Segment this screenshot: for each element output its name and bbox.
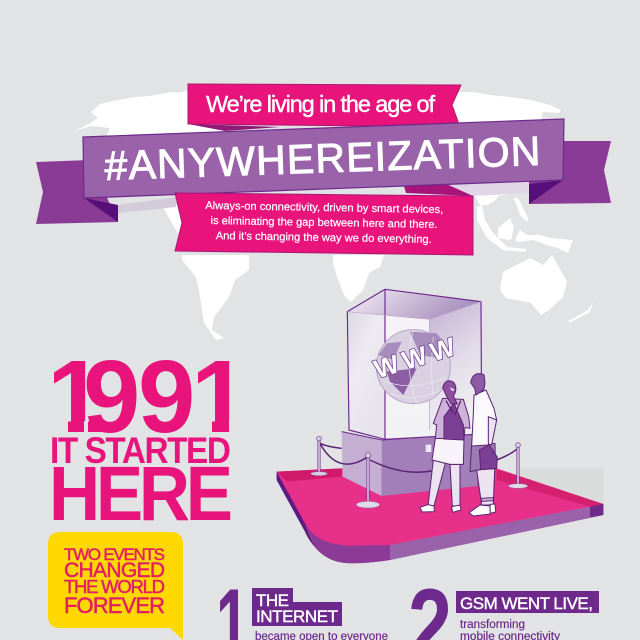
glass case — [347, 289, 482, 439]
event 2 description: transforming — [460, 619, 525, 631]
top banner text: We’re living in the age of — [206, 91, 435, 117]
callout text: THE WORLD — [64, 576, 165, 597]
ribbon: right fold — [529, 180, 563, 204]
callout text: FOREVER — [64, 593, 165, 618]
callout: two events — [48, 532, 183, 640]
heading: 1991 it started here: IT STARTED — [50, 430, 231, 471]
subtitle text: And it’s changing the way we do everything. — [216, 230, 432, 246]
event 2 description — [460, 619, 560, 640]
platform — [277, 468, 603, 563]
heading: 1991 it started here — [40, 339, 253, 537]
ribbon shadow: right — [440, 180, 529, 196]
main title: #ANYWHEREIZATION — [104, 128, 541, 189]
subtitle text — [205, 200, 443, 246]
ribbon: left tail — [36, 160, 118, 224]
infographic canvas — [36, 84, 611, 640]
label box: the internet — [252, 588, 342, 626]
callout text — [64, 545, 165, 618]
heading: 1991 it started here: HERE — [49, 450, 233, 537]
world map — [73, 90, 593, 340]
bottom banner fold — [403, 183, 473, 196]
label box: the internet: INTERNET — [256, 607, 338, 626]
plinth — [342, 432, 477, 496]
subtitle text: is eliminating the gap between here and there. — [210, 215, 438, 231]
event 1: the internet — [220, 588, 388, 640]
ribbon shadow: left — [118, 197, 176, 213]
callout text: TWO EVENTS — [64, 545, 165, 564]
callout text: CHANGED — [64, 559, 165, 582]
event 2: gsm went live — [411, 588, 599, 640]
label box: the internet: THE — [256, 591, 289, 610]
ribbon: right tail — [529, 141, 611, 204]
heading: 1991 it started here: 1991 — [47, 339, 248, 454]
man visitor — [469, 374, 497, 516]
top banner — [188, 84, 461, 131]
main ribbon — [83, 119, 564, 198]
bottom banner — [175, 193, 473, 255]
woman visitor — [420, 381, 470, 512]
globe with WWW letters: WWW — [370, 331, 459, 384]
illustration: WWW globe exhibit — [277, 289, 603, 563]
label box: gsm: GSM WENT LIVE, — [460, 594, 593, 613]
ribbon: left fold — [84, 198, 118, 222]
subtitle text: Always-on connectivity, driven by smart devices, — [205, 200, 443, 216]
floor shadow — [517, 468, 603, 504]
stanchions and ropes — [311, 436, 528, 508]
